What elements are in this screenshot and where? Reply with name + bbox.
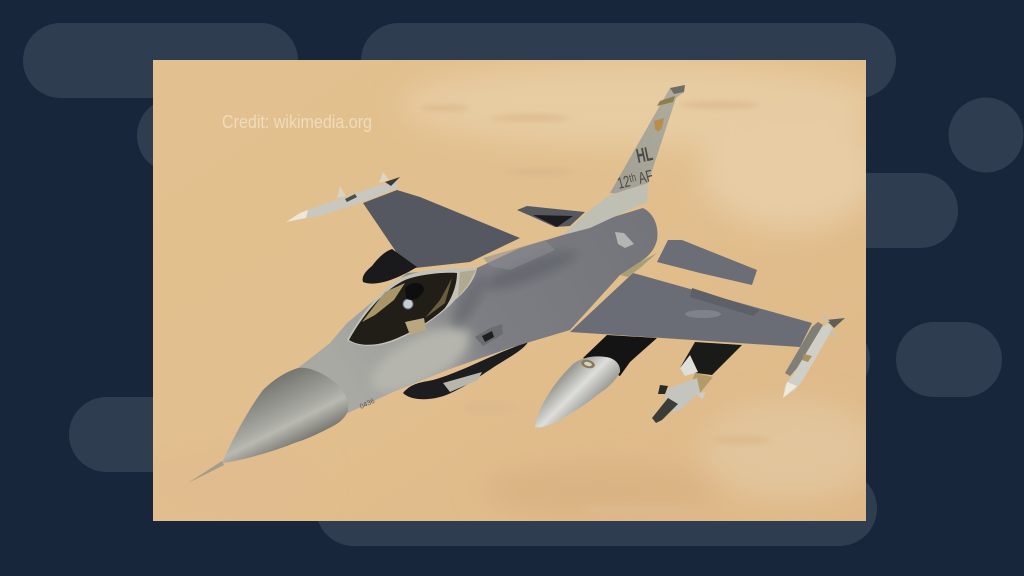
ventral intake (403, 342, 528, 399)
fuselage roundel patch (615, 232, 634, 248)
dorsal tail fairing (563, 183, 648, 235)
fuselage (298, 208, 657, 413)
far wing underside tank (363, 249, 417, 284)
vertical tail: 12ᵗʰ AF (615, 166, 655, 192)
nose cone (222, 368, 348, 463)
pitot probe (188, 461, 224, 483)
exhaust shoulder (620, 253, 657, 277)
far wing missile (286, 172, 400, 222)
near wing pylons and stores behind the wing (583, 335, 742, 376)
canopy (347, 268, 477, 346)
vertical tail: HL (634, 142, 655, 168)
far wing (363, 190, 520, 268)
photo: F-16 over desert (140, 60, 880, 521)
intake pod (443, 372, 482, 392)
gun vent (475, 324, 503, 346)
jet (188, 85, 845, 483)
bomb under wing (652, 355, 713, 423)
far tailplane (517, 206, 585, 227)
near wing (570, 273, 812, 347)
desert background (140, 60, 880, 521)
near tailplane (657, 240, 757, 285)
external fuel tank (535, 356, 620, 427)
vertical tail (610, 85, 685, 195)
wingtip missile (783, 312, 845, 398)
credit text: Credit: wikimedia.org (222, 112, 372, 132)
fuselage serial: 0436 (359, 398, 376, 411)
